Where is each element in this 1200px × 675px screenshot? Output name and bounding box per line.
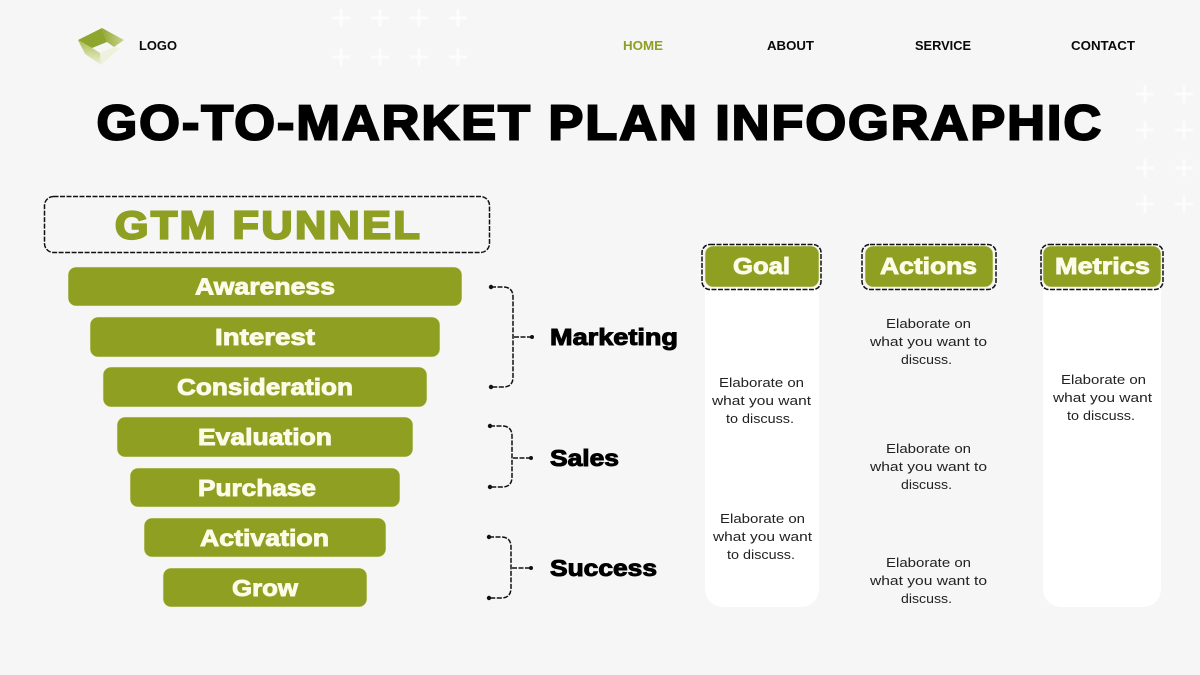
- column background: [1043, 270, 1161, 607]
- bracket: Success: [487, 535, 657, 600]
- text block: to discuss.: [727, 547, 795, 562]
- funnel step: Consideration: Consideration: [177, 374, 353, 400]
- text block: what you want to: [869, 459, 987, 474]
- text block: Elaborate on: [886, 316, 971, 331]
- text block: discuss.: [901, 591, 952, 606]
- text block: what you want to: [869, 334, 987, 349]
- text block: [712, 511, 812, 562]
- title: GO-TO-MARKET PLAN INFOGRAPHIC: [96, 95, 1101, 150]
- navigation: [623, 38, 1135, 53]
- funnel step: Grow: [163, 568, 367, 607]
- funnel step: Awareness: [68, 267, 462, 306]
- text block: what you want: [1052, 390, 1152, 405]
- text block: Elaborate on: [720, 511, 805, 526]
- funnel step: Activation: [144, 518, 386, 557]
- text block: to discuss.: [726, 411, 794, 426]
- Metrics heading: Metrics: [1055, 253, 1150, 279]
- bracket: Sales: [488, 424, 619, 489]
- text block: [869, 316, 987, 367]
- panel: Goal column: [702, 244, 821, 607]
- funnel step: Awareness: Awareness: [195, 274, 335, 300]
- bracket: Marketing: Marketing: [550, 324, 678, 350]
- panel: Metrics column: [1041, 244, 1163, 607]
- Actions heading: [862, 244, 996, 290]
- bracket: Marketing: [489, 285, 678, 389]
- text block: what you want to: [869, 573, 987, 588]
- funnel step: Interest: Interest: [215, 324, 315, 350]
- panel: GTM funnel: [44, 196, 490, 607]
- text block: [869, 441, 987, 492]
- text block: [711, 375, 811, 426]
- text block: what you want: [711, 393, 811, 408]
- column background: [705, 270, 819, 607]
- panel: Actions column: [862, 244, 996, 606]
- bracket: Sales: Sales: [550, 445, 619, 471]
- text block: discuss.: [901, 477, 952, 492]
- text block: [869, 555, 987, 606]
- funnel step: Purchase: Purchase: [198, 475, 316, 501]
- funnel heading box: GTM FUNNEL: [115, 203, 420, 247]
- text block: Elaborate on: [886, 441, 971, 456]
- funnel step: Activation: Activation: [200, 525, 329, 551]
- decorative plus pattern: top: [332, 9, 467, 66]
- text block: Elaborate on: [719, 375, 804, 390]
- nav: service: SERVICE: [915, 38, 971, 53]
- bracket: Success: Success: [550, 555, 657, 581]
- logo text: LOGO: [139, 38, 177, 53]
- funnel step: Purchase: [130, 468, 400, 507]
- logo: [78, 28, 177, 65]
- Goal heading: [702, 244, 821, 290]
- nav: home: HOME: [623, 38, 663, 53]
- decorative plus pattern: right: [1136, 85, 1193, 213]
- funnel step: Evaluation: [117, 417, 413, 457]
- text block: to discuss.: [1067, 408, 1135, 423]
- Metrics heading: [1041, 244, 1163, 290]
- text block: discuss.: [901, 352, 952, 367]
- text block: Elaborate on: [1061, 372, 1146, 387]
- funnel step: Evaluation: Evaluation: [198, 424, 332, 450]
- Actions heading: Actions: [880, 253, 977, 279]
- funnel heading box: [44, 196, 490, 252]
- text block: what you want: [712, 529, 812, 544]
- text block: [1052, 372, 1152, 423]
- nav: contact: CONTACT: [1071, 38, 1135, 53]
- nav: about: ABOUT: [767, 38, 814, 53]
- funnel step: Interest: [90, 317, 440, 357]
- funnel step: Grow: Grow: [232, 575, 298, 601]
- funnel step: Consideration: [103, 367, 427, 407]
- Goal heading: Goal: [733, 253, 790, 279]
- icon: logo diamond: [78, 28, 124, 65]
- text block: Elaborate on: [886, 555, 971, 570]
